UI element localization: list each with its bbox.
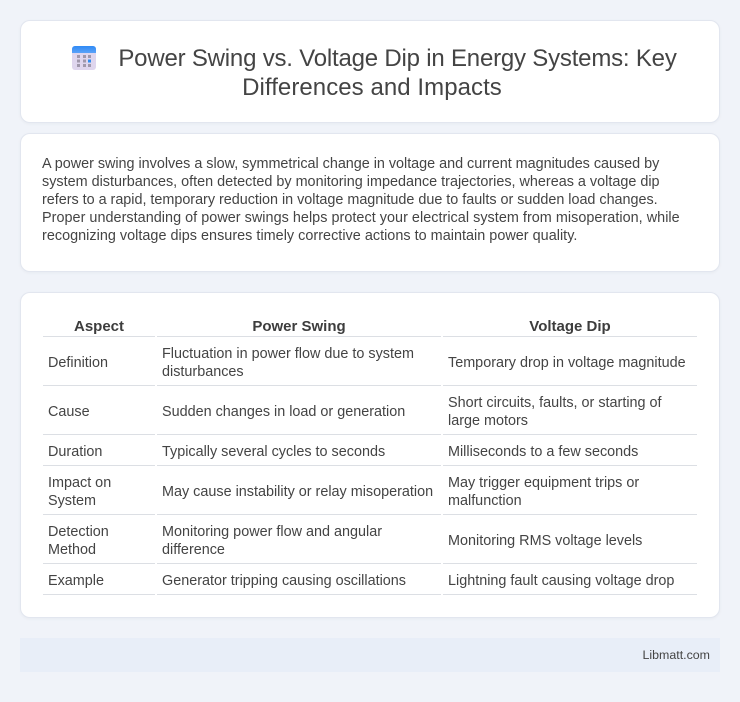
row: detection method: Monitoring power flow and angular bbox=[162, 524, 382, 540]
intro text: refers to a rapid, temporary reduction in voltage magnitude due to faults or sudden load changes. bbox=[42, 192, 658, 208]
row: duration: Duration bbox=[48, 444, 102, 460]
intro text: A power swing involves a slow, symmetrical change in voltage and current magnitudes caused by bbox=[42, 156, 659, 172]
row: impact on system: May cause instability or relay misoperation bbox=[162, 484, 433, 500]
row: definition: Temporary drop in voltage magnitude bbox=[448, 355, 686, 371]
row: impact on system: System bbox=[48, 493, 96, 509]
footer text: Libmatt.com bbox=[643, 648, 710, 662]
row: duration: Typically several cycles to seconds bbox=[162, 444, 385, 460]
row: impact on system: May trigger equipment trips or bbox=[448, 475, 639, 491]
row: example: Generator tripping causing oscillations bbox=[162, 573, 406, 589]
table card bbox=[20, 292, 720, 618]
row: definition: Definition bbox=[48, 355, 108, 371]
row: definition bbox=[48, 346, 686, 380]
row: cause bbox=[48, 395, 662, 429]
title bbox=[118, 45, 677, 101]
intro text: recognizing voltage dips ensures timely corrective actions to maintain power quality. bbox=[42, 228, 577, 244]
table header: Aspect bbox=[74, 318, 124, 335]
intro card bbox=[20, 133, 720, 272]
row: definition: Fluctuation in power flow due to system bbox=[162, 346, 414, 362]
title card bbox=[20, 20, 720, 123]
row: detection method bbox=[48, 524, 642, 558]
row: cause: Cause bbox=[48, 404, 90, 420]
row: definition: disturbances bbox=[162, 364, 244, 380]
row: duration bbox=[48, 444, 638, 460]
row: impact on system: Impact on bbox=[48, 475, 111, 491]
row: impact on system bbox=[48, 475, 639, 509]
table header bbox=[74, 318, 611, 335]
row: cause: Short circuits, faults, or starting of bbox=[448, 395, 662, 411]
row: impact on system: malfunction bbox=[448, 493, 522, 509]
row: duration: Milliseconds to a few seconds bbox=[448, 444, 638, 460]
row: detection method: difference bbox=[162, 542, 225, 558]
row: cause: large motors bbox=[448, 413, 528, 429]
row: example bbox=[48, 573, 674, 589]
title: Differences and Impacts bbox=[242, 74, 502, 101]
row: detection method: Detection bbox=[48, 524, 109, 540]
table header: Power Swing bbox=[252, 318, 346, 335]
row: detection method: Monitoring RMS voltage levels bbox=[448, 533, 642, 549]
footer bar bbox=[20, 638, 720, 672]
table header: Voltage Dip bbox=[529, 318, 611, 335]
icon: calendar bbox=[72, 46, 96, 70]
row: detection method: Method bbox=[48, 542, 96, 558]
row: cause: Sudden changes in load or generation bbox=[162, 404, 405, 420]
title: Power Swing vs. Voltage Dip in Energy Systems: Key bbox=[118, 45, 677, 72]
intro text bbox=[42, 156, 680, 244]
intro text: system disturbances, often detected by monitoring impedance trajectories, whereas a voltage dip bbox=[42, 174, 660, 190]
intro text: Proper understanding of power swings helps protect your electrical system from misoperation, while bbox=[42, 210, 680, 226]
row: example: Example bbox=[48, 573, 104, 589]
row: example: Lightning fault causing voltage drop bbox=[448, 573, 674, 589]
comparison table bbox=[43, 318, 697, 595]
